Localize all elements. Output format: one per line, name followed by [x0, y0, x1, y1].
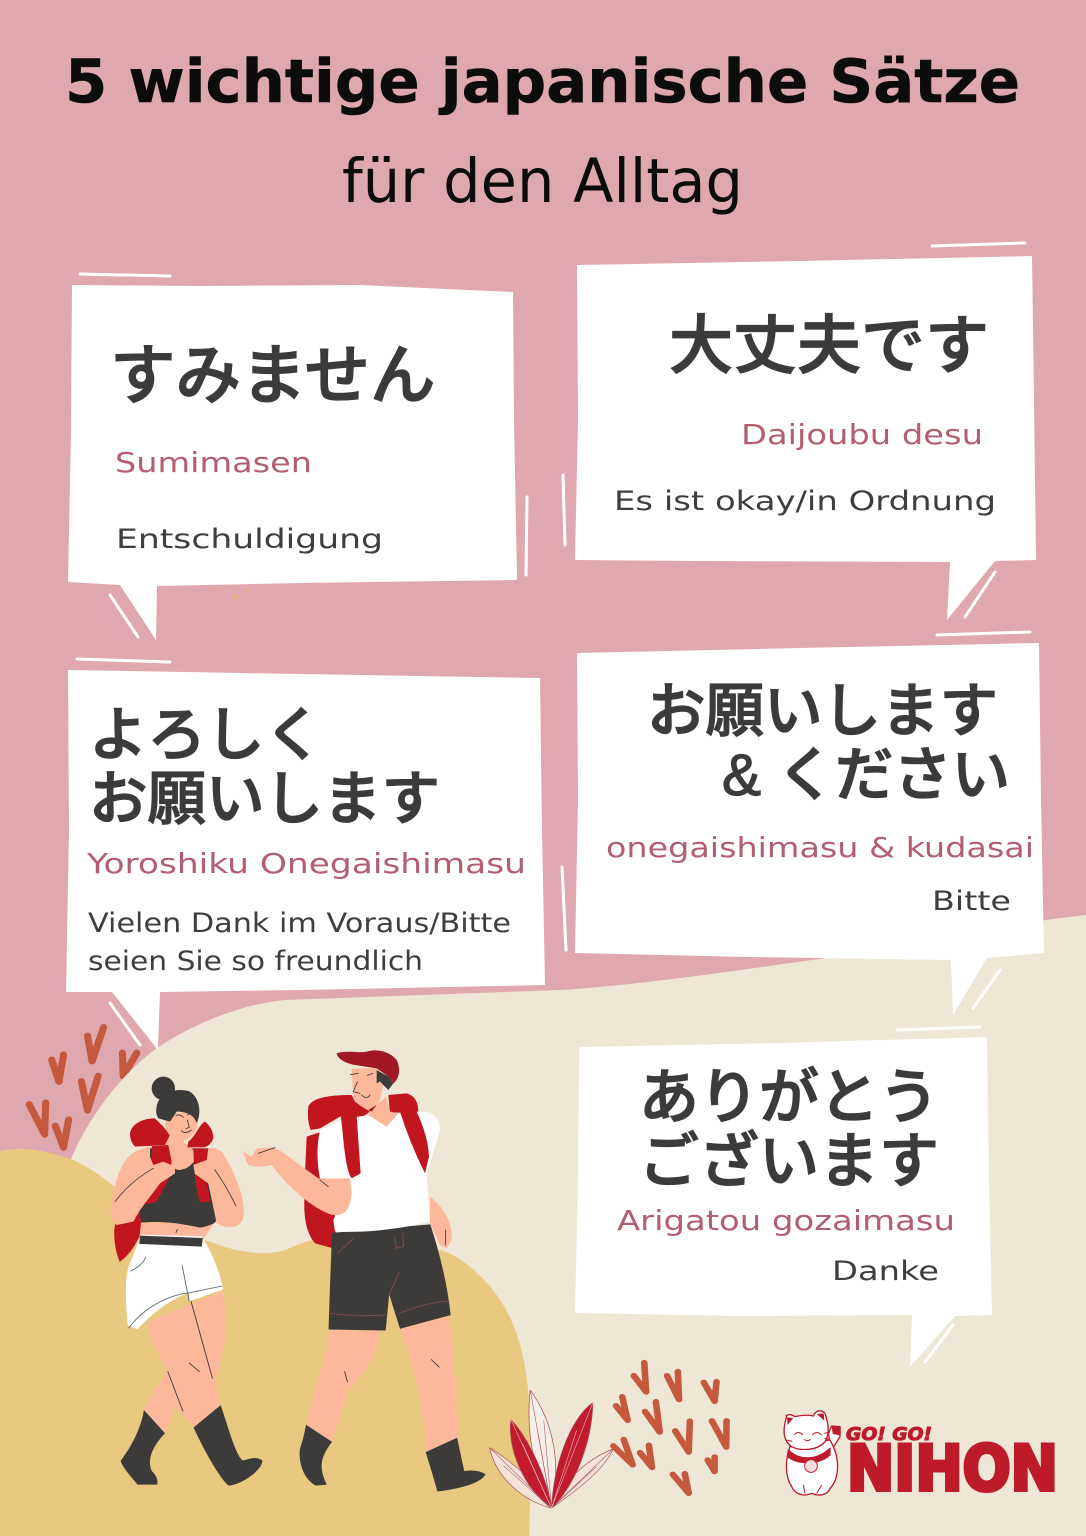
german translation: Entschuldigung — [116, 524, 383, 555]
bubble accents — [80, 274, 527, 637]
chevron marks: lower middle — [613, 1363, 727, 1493]
subtitle: für den Alltag — [342, 146, 743, 217]
romaji: Yoroshiku Onegaishimasu — [86, 847, 526, 880]
japanese phrase: 大丈夫です — [669, 310, 989, 382]
bubble shape — [68, 285, 517, 640]
illustration: man hiker — [243, 1050, 486, 1491]
logo text: go go: GO! GO! — [846, 1424, 932, 1445]
japanese phrase: すみません — [110, 339, 436, 412]
title: 5 wichtige japanische Sätze — [65, 47, 1020, 117]
background: cream hill — [55, 915, 1086, 1536]
bubble accents — [897, 1027, 980, 1362]
logo: Go! Go! Nihon — [784, 1411, 1058, 1505]
bubble shape — [575, 256, 1036, 620]
romaji: Arigatou gozaimasu — [617, 1204, 955, 1237]
heading — [65, 47, 1020, 217]
japanese phrase: お願いします — [647, 679, 998, 744]
bubble shape — [66, 670, 545, 1050]
japanese phrase: ございます — [639, 1128, 939, 1195]
german translation: Bitte — [932, 886, 1011, 917]
illustration: leaf plant — [490, 1390, 613, 1508]
bubble shape — [575, 1037, 992, 1367]
panel: onegaishimasu and kudasai bubble — [562, 632, 1044, 1015]
panel: Daijoubu desu bubble — [563, 243, 1036, 620]
background: yellow hill — [0, 1149, 531, 1536]
panel: Arigatou gozaimasu bubble — [575, 1027, 992, 1367]
bubble accents — [563, 243, 1025, 617]
romaji: Daijoubu desu — [741, 418, 983, 451]
small orange specks — [216, 588, 250, 600]
panel: Sumimasen bubble — [68, 274, 527, 640]
german translation: seien Sie so freundlich — [88, 946, 423, 977]
japanese phrase: お願いします — [89, 767, 440, 832]
romaji: Sumimasen — [115, 446, 312, 479]
chevron marks: upper left — [29, 1027, 137, 1147]
romaji: onegaishimasu & kudasai — [606, 831, 1034, 864]
logo text: nihon: NIHON — [847, 1432, 1058, 1505]
german translation: Danke — [832, 1256, 939, 1287]
japanese phrase: ありがとう — [639, 1064, 939, 1131]
illustration: woman hiker — [110, 1077, 262, 1486]
bubble accents — [562, 632, 1030, 1008]
icon: lucky cat — [784, 1411, 840, 1495]
panel: Yoroshiku Onegaishimasu bubble — [66, 659, 545, 1050]
japanese phrase: & ください — [722, 743, 1010, 808]
bubble accents — [77, 659, 170, 1045]
bubble shape — [575, 643, 1044, 1015]
japanese phrase: よろしく — [89, 703, 323, 768]
german translation: Vielen Dank im Voraus/Bitte — [88, 908, 511, 939]
german translation: Es ist okay/in Ordnung — [614, 486, 996, 517]
